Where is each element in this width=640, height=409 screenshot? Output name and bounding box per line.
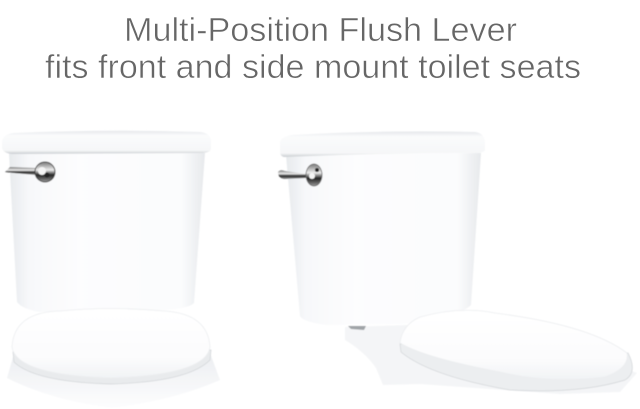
- title: [45, 11, 581, 85]
- seat: [400, 310, 632, 391]
- toilet base: [7, 353, 220, 408]
- flush lever: [5, 162, 55, 182]
- tank lid: [2, 131, 211, 154]
- title: Multi-Position Flush Lever: [124, 11, 517, 48]
- seat: [12, 308, 211, 384]
- toilet base and trapway: [345, 322, 637, 394]
- tank lid: [280, 131, 485, 157]
- side view toilet: [278, 131, 637, 394]
- front view toilet: [2, 131, 220, 408]
- tank body: [9, 153, 205, 312]
- tank body: [286, 153, 481, 325]
- flush lever: [278, 164, 322, 186]
- title: fits front and side mount toilet seats: [45, 48, 581, 85]
- drain shadow: [348, 326, 366, 330]
